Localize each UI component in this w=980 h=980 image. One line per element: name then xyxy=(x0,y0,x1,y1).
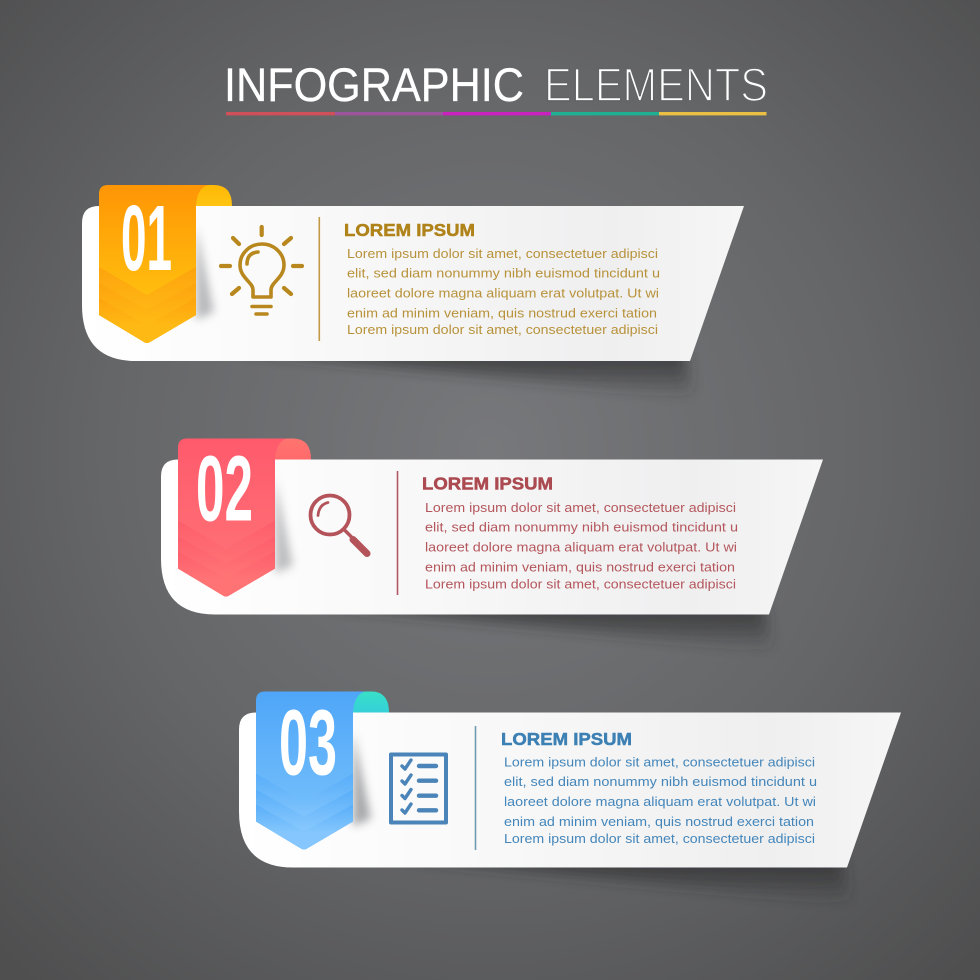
body text: Lorem ipsum dolor sit amet, consectetuer adipisci xyxy=(347,247,658,261)
body text: Lorem ipsum dolor sit amet, consectetuer adipisci xyxy=(504,756,815,770)
title: INFOGRAPHIC xyxy=(224,58,524,111)
panel shadow xyxy=(309,604,773,652)
paper card xyxy=(82,206,744,361)
paper card xyxy=(239,712,901,868)
ribbon shadow xyxy=(196,225,214,320)
icon: magnifying glass xyxy=(310,496,367,554)
title xyxy=(224,58,768,111)
heading: LOREM IPSUM xyxy=(422,474,553,494)
body text: enim ad minim veniam, quis nostrud exerci tation xyxy=(347,306,657,320)
body text: elit, sed diam nonummy nibh euismod tincidunt u xyxy=(347,266,660,280)
panel: step 01 xyxy=(82,185,744,398)
number 03: 03 xyxy=(279,690,337,794)
body text: laoreet dolore magna aliquam erat volutpat. Ut wi xyxy=(347,286,659,300)
body text: Lorem ipsum dolor sit amet, consectetuer adipisci xyxy=(425,578,736,592)
heading: LOREM IPSUM xyxy=(344,220,475,240)
ribbon 03 xyxy=(256,692,365,850)
paper card xyxy=(161,460,823,614)
panel: step 02 xyxy=(161,436,823,652)
ribbon shadow xyxy=(275,478,293,574)
ribbon shadow xyxy=(353,732,371,826)
title: ELEMENTS xyxy=(544,58,768,111)
panel shadow xyxy=(387,856,851,904)
icon: light bulb xyxy=(221,227,302,314)
ribbon fold back xyxy=(269,438,311,460)
divider xyxy=(397,471,398,595)
heading: LOREM IPSUM xyxy=(501,729,632,749)
body text: Lorem ipsum dolor sit amet, consectetuer adipisci xyxy=(504,832,815,846)
panel shadow xyxy=(230,350,694,398)
divider xyxy=(318,217,320,341)
ribbon 02 xyxy=(178,438,287,596)
body text xyxy=(504,756,817,846)
body text: Lorem ipsum dolor sit amet, consectetuer adipisci xyxy=(347,323,658,337)
ribbon 01 xyxy=(99,185,208,343)
body text: laoreet dolore magna aliquam erat volutpat. Ut wi xyxy=(504,795,816,809)
ribbon fold back xyxy=(190,185,232,206)
body text: elit, sed diam nonummy nibh euismod tincidunt u xyxy=(425,520,738,534)
body text: Lorem ipsum dolor sit amet, consectetuer adipisci xyxy=(425,501,736,515)
divider xyxy=(475,726,476,850)
panel: step 01: 01 xyxy=(121,186,172,290)
body text: enim ad minim veniam, quis nostrud exerci tation xyxy=(425,560,735,574)
body text xyxy=(347,247,660,337)
icon: checklist xyxy=(391,754,446,822)
body text xyxy=(425,501,738,592)
ribbon fold back xyxy=(347,692,389,712)
title rainbow underline xyxy=(226,112,766,115)
body text: enim ad minim veniam, quis nostrud exerci tation xyxy=(504,815,814,829)
number 02: 02 xyxy=(196,436,253,540)
body text: laoreet dolore magna aliquam erat volutpat. Ut wi xyxy=(425,540,737,554)
panel: step 03 xyxy=(239,690,901,904)
body text: elit, sed diam nonummy nibh euismod tincidunt u xyxy=(504,775,817,789)
